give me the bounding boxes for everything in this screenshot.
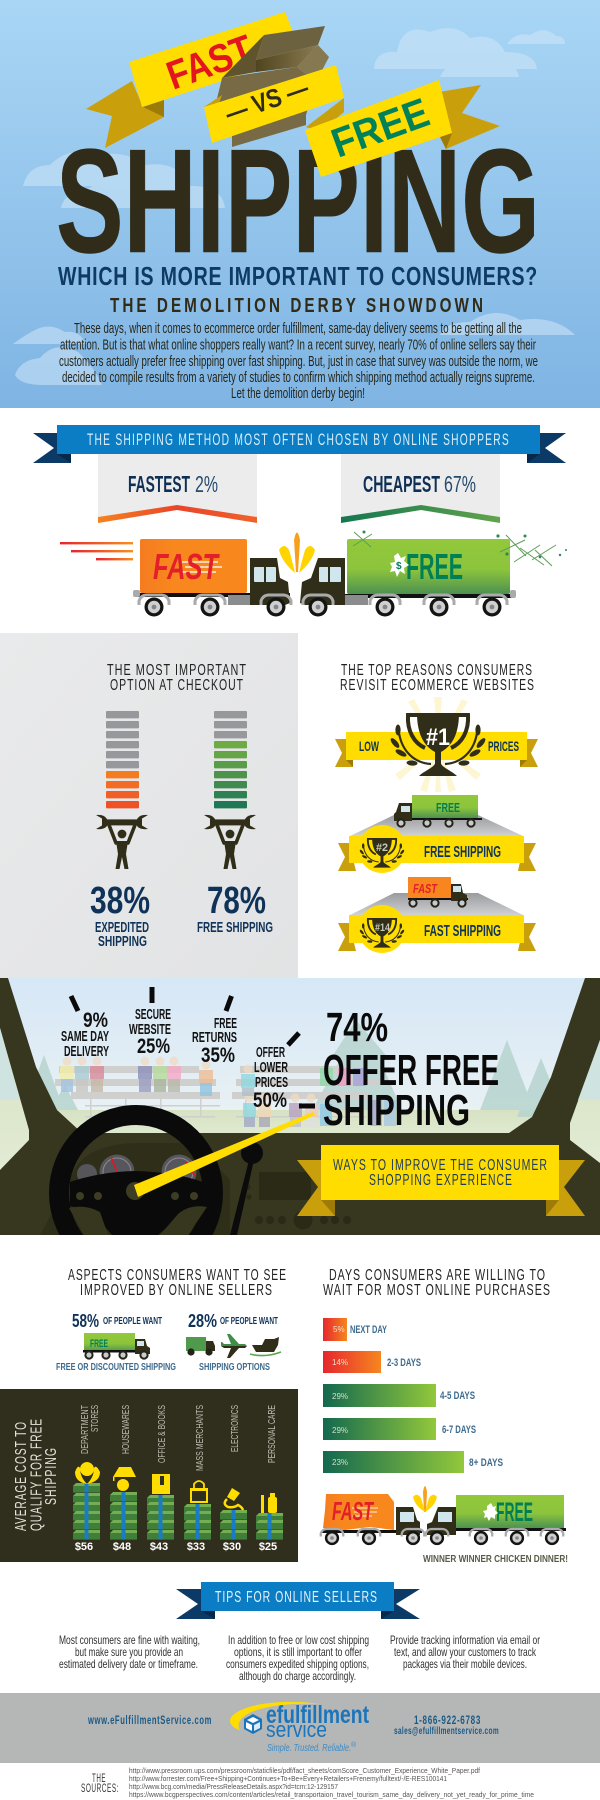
panel: windshield speedometer scene bbox=[0, 978, 600, 1235]
icon: gauges bbox=[77, 1154, 196, 1180]
ribbon: low prices rank 1: PRICES bbox=[488, 738, 519, 754]
ribbon: free shipping rank 2: #2 bbox=[376, 842, 388, 854]
icon: bleachers bbox=[55, 1066, 380, 1118]
icon: rays bbox=[395, 697, 481, 792]
phone and email: sales@efulfillmentservice.com bbox=[394, 1726, 499, 1737]
stat: secure website 25%: SECURE bbox=[135, 1007, 171, 1023]
stat: offer lower prices 50%: PRICES bbox=[255, 1075, 288, 1091]
panel: most often chosen bbox=[33, 425, 567, 616]
heading: aspects: ASPECTS CONSUMERS WANT TO SEE bbox=[68, 1267, 287, 1284]
heading: checkout: THE MOST IMPORTANT bbox=[107, 662, 247, 679]
label: expedited shipping: SHIPPING bbox=[98, 933, 147, 950]
labels: categories: HOUSEWARES bbox=[121, 1405, 132, 1454]
icon: clouds bbox=[13, 28, 575, 385]
needle: yellow pointer bbox=[134, 1112, 315, 1197]
chart: bar chart: 4-5 DAYS bbox=[440, 1390, 475, 1402]
stat: 9% same day delivery: SAME DAY bbox=[61, 1029, 109, 1045]
icon: trophy #1 bbox=[389, 713, 487, 776]
label: shipping options: SHIPPING OPTIONS bbox=[199, 1361, 270, 1373]
stat: 9% same day delivery: DELIVERY bbox=[64, 1044, 109, 1060]
stat: 74% offer free shipping bbox=[324, 1012, 498, 1126]
icon: free truck bbox=[300, 539, 516, 616]
logo: efulfillment bbox=[266, 1701, 370, 1729]
stat: 78%: 78% bbox=[207, 880, 266, 922]
icon: gearshift bbox=[230, 1142, 263, 1235]
ribbon: fast shipping rank 14: FAST SHIPPING bbox=[424, 923, 501, 940]
card: fastest 2%: FASTEST bbox=[128, 471, 190, 497]
stat: 58% of people want: OF PEOPLE WANT bbox=[103, 1315, 162, 1327]
intro paragraph: Let the demolition derby begin! bbox=[231, 386, 365, 402]
logo: service bbox=[266, 1717, 327, 1742]
icon: pine trees bbox=[38, 1022, 550, 1117]
logo bbox=[230, 1701, 370, 1754]
tip 3: Provide tracking information via email or bbox=[390, 1633, 540, 1647]
label: expedited shipping: EXPEDITED bbox=[95, 919, 149, 936]
values bbox=[75, 1541, 277, 1553]
panel: tips bbox=[59, 1582, 540, 1683]
stat: 58% of people want bbox=[72, 1311, 162, 1331]
ribbon: FREE bbox=[305, 80, 500, 177]
banner: tips for online sellers: TIPS FOR ONLINE SELLERS bbox=[215, 1589, 378, 1606]
icon: green sparkles bbox=[353, 530, 567, 566]
panel: footer contact band bbox=[0, 1693, 600, 1763]
road 2 bbox=[350, 815, 523, 836]
heading: average cost bbox=[13, 1418, 60, 1531]
stat: 28% of people want bbox=[188, 1311, 278, 1331]
stat: free returns 35%: RETURNS bbox=[192, 1030, 237, 1046]
ribbon: free shipping rank 2 bbox=[338, 825, 536, 873]
values: $33 bbox=[187, 1541, 205, 1553]
card: cheapest 67%: CHEAPEST bbox=[363, 471, 440, 497]
icon: free truck: FREE bbox=[406, 546, 463, 587]
stat: secure website 25%: 25% bbox=[137, 1035, 170, 1058]
icon: fast truck bbox=[133, 539, 291, 616]
stat: 58% of people want: 58% bbox=[72, 1311, 99, 1331]
stat: 74% offer free shipping: SHIPPING bbox=[323, 1086, 470, 1135]
tip 3 bbox=[390, 1633, 540, 1671]
stat: 28% of people want: 28% bbox=[188, 1311, 217, 1331]
label: the sources bbox=[81, 1771, 119, 1795]
chart: bar chart: NEXT DAY bbox=[350, 1324, 387, 1336]
labels: categories: MASS MERCHANTS bbox=[195, 1405, 206, 1471]
values: $48 bbox=[113, 1541, 131, 1553]
chart: bar chart: 5% bbox=[333, 1325, 345, 1334]
logo: ® bbox=[351, 1741, 357, 1749]
icon: free truck: $ bbox=[396, 561, 402, 572]
icon: steering wheel bbox=[49, 1105, 223, 1235]
tip 2 bbox=[226, 1633, 369, 1683]
ribbon: FAST bbox=[86, 12, 302, 148]
labels: categories: OFFICE & BOOKS bbox=[157, 1405, 168, 1463]
heading: average cost: AVERAGE COST TO bbox=[13, 1421, 30, 1531]
tip 1: Most consumers are fine with waiting, bbox=[59, 1633, 200, 1647]
ribbon: low prices rank 1 bbox=[335, 732, 538, 767]
source list bbox=[129, 1766, 534, 1799]
icon: speed lines bbox=[60, 542, 133, 560]
icon: free truck: FREE bbox=[90, 1338, 108, 1350]
ribbon: FREE: FREE bbox=[325, 89, 435, 166]
ribbon: VS bbox=[204, 65, 344, 143]
card: cheapest 67%: 67% bbox=[444, 471, 476, 497]
phone and email: 1-866-922-6783 bbox=[414, 1713, 481, 1727]
chart: money stacks bbox=[73, 1483, 283, 1540]
bar gauge: free shipping bbox=[214, 711, 247, 808]
icon: trophy #1: #1 bbox=[426, 724, 450, 751]
tip 2: In addition to free or low cost shipping bbox=[228, 1633, 369, 1647]
banner: tips for online sellers bbox=[176, 1582, 420, 1619]
heading: average cost: QUALIFY FOR FREE bbox=[28, 1418, 46, 1531]
heading: aspects: IMPROVED BY ONLINE SELLERS bbox=[80, 1282, 273, 1299]
ribbon: ways to improve: SHOPPING EXPERIENCE bbox=[369, 1172, 513, 1189]
road 14 bbox=[350, 893, 523, 915]
icon: windshield frame and dashboard bbox=[0, 978, 600, 1235]
icon: dash panel interior bbox=[40, 1143, 351, 1235]
intro paragraph bbox=[59, 321, 538, 402]
website: www.eFulfillmentService.com bbox=[87, 1713, 212, 1727]
panel: average cost to qualify bbox=[0, 1389, 298, 1562]
label: free shipping: FREE SHIPPING bbox=[197, 919, 273, 936]
label: expedited shipping bbox=[95, 919, 149, 950]
icon: crumpled fast truck: FAST bbox=[332, 1496, 374, 1526]
chart: bar chart: 29% bbox=[332, 1426, 348, 1435]
heading: revisit bbox=[340, 662, 535, 694]
icon: small fast truck: FAST bbox=[413, 881, 438, 896]
chart: bar chart: 23% bbox=[332, 1458, 348, 1467]
ribbon: FAST: FAST bbox=[161, 27, 259, 98]
subtitle: showdown: THE DEMOLITION DERBY SHOWDOWN bbox=[110, 295, 486, 317]
icon: small free truck: FREE bbox=[436, 800, 460, 815]
icon: side windows bbox=[0, 1028, 600, 1170]
label: the sources: THE bbox=[92, 1771, 106, 1785]
values: $25 bbox=[259, 1541, 277, 1553]
labels: categories bbox=[80, 1405, 278, 1471]
panel: most important option at checkout bbox=[0, 633, 298, 978]
labels: categories: ELECTRONICS bbox=[230, 1405, 241, 1452]
panel: aspects consumers want improved bbox=[56, 1267, 287, 1373]
icons: product categories bbox=[75, 1462, 277, 1513]
ribbon: free shipping rank 2: FREE SHIPPING bbox=[424, 844, 501, 861]
stat: secure website 25%: WEBSITE bbox=[129, 1022, 171, 1038]
chart: bar chart: 2-3 DAYS bbox=[387, 1357, 421, 1369]
labels: categories: DEPARTMENT bbox=[80, 1405, 91, 1454]
chart: bar chart: 6-7 DAYS bbox=[442, 1424, 476, 1436]
icon: crumpled fast truck bbox=[321, 1494, 424, 1545]
icon: cardboard box bbox=[216, 26, 329, 147]
heading: checkout bbox=[107, 662, 247, 694]
chart: bar chart: 14% bbox=[332, 1358, 348, 1367]
tip 1 bbox=[59, 1633, 200, 1671]
values: $43 bbox=[150, 1541, 168, 1553]
labels: categories: STORES bbox=[90, 1405, 101, 1432]
icon: free truck bbox=[426, 1495, 566, 1545]
icon: person lifting wrench left bbox=[96, 815, 148, 869]
heading: aspects bbox=[68, 1267, 287, 1299]
source list: https://www.bcgperspectives.com/content/articles/retail_transportaion_travel_tourism_same_day_delivery_not_yet_ready_for_prime_time bbox=[129, 1790, 534, 1799]
stat: 9% same day delivery bbox=[61, 1012, 109, 1056]
chart: bar chart: 29% bbox=[332, 1392, 348, 1401]
source list: http://www.bcg.com/media/PressReleaseDetails.aspx?id=tcm:12-129157 bbox=[129, 1782, 338, 1791]
heading: average cost: SHIPPING bbox=[43, 1447, 60, 1505]
stat: free returns 35% bbox=[192, 1018, 237, 1062]
label: the sources: SOURCES: bbox=[81, 1781, 119, 1795]
source list: http://www.forrester.com/Free+Shipping+Continues+To+Be+Every+Retailers+Frenemy/fulltext/-/E-RES100141 bbox=[129, 1774, 447, 1783]
ticks: dial marks bbox=[71, 987, 315, 1106]
label: free or discounted shipping: FREE OR DISCOUNTED SHIPPING bbox=[56, 1361, 176, 1373]
stat: free returns 35%: 35% bbox=[201, 1044, 235, 1067]
bar gauge: expedited bbox=[106, 711, 139, 808]
banner: shipping method bbox=[33, 425, 566, 463]
icon: person lifting wrench right bbox=[204, 815, 256, 869]
tip 1: but make sure you provide an bbox=[75, 1645, 183, 1659]
icon: small fast truck bbox=[408, 877, 468, 908]
stat: offer lower prices 50%: OFFER bbox=[256, 1045, 285, 1061]
ribbon: VS: — VS — bbox=[221, 72, 312, 129]
tip 1: estimated delivery date or timeframe. bbox=[59, 1657, 198, 1671]
stat: free returns 35%: FREE bbox=[214, 1016, 237, 1032]
panel: sources bbox=[81, 1766, 534, 1799]
values: $56 bbox=[75, 1541, 93, 1553]
phone and email bbox=[394, 1713, 499, 1737]
tip 2: consumers expedited shipping options, bbox=[226, 1657, 369, 1671]
source list: http://www.pressroom.ups.com/pressroom/staticfiles/pdf/fact_sheets/comScore_Customer_Experience_White_Paper.pdf bbox=[129, 1766, 481, 1775]
stat: 74% offer free shipping: OFFER FREE bbox=[323, 1046, 499, 1095]
stat: 28% of people want: OF PEOPLE WANT bbox=[220, 1315, 278, 1327]
panel: days willing to wait bbox=[321, 1267, 568, 1565]
ribbon: ways to improve bbox=[297, 1145, 585, 1216]
chart: bar chart: 8+ DAYS bbox=[469, 1457, 503, 1469]
icon: small free truck bbox=[394, 795, 482, 828]
stat: secure website 25% bbox=[129, 1009, 171, 1053]
tip 3: text, and allow your customers to track bbox=[394, 1645, 537, 1659]
card: fastest 2% bbox=[98, 454, 257, 523]
stat: offer lower prices 50%: 50% bbox=[253, 1089, 287, 1112]
tip 2: options, it is still important to offer bbox=[234, 1645, 362, 1659]
ribbon: low prices rank 1: LOW bbox=[359, 738, 379, 754]
tip 3: packages via their mobile devices. bbox=[403, 1657, 527, 1671]
stat: 38%: 38% bbox=[90, 880, 150, 922]
heading: checkout: OPTION AT CHECKOUT bbox=[110, 677, 244, 694]
stat: 9% same day delivery: 9% bbox=[83, 1009, 108, 1032]
card: cheapest 67% bbox=[341, 454, 500, 523]
icon: free truck: FREE bbox=[496, 1497, 533, 1527]
logo: Simple. Trusted. Reliable. bbox=[267, 1743, 351, 1754]
stat: 74% offer free shipping: 74% bbox=[326, 1004, 388, 1050]
ribbon: fast shipping rank 14: #14 bbox=[375, 922, 391, 934]
values: $30 bbox=[223, 1541, 241, 1553]
inner book mark and bag hole bbox=[160, 1476, 206, 1501]
icon: fast truck: FAST bbox=[153, 546, 220, 587]
icon: truck plane ship bbox=[186, 1334, 281, 1358]
labels: categories: PERSONAL CARE bbox=[267, 1405, 278, 1463]
panel: hero header bbox=[0, 0, 600, 408]
ribbon: fast shipping rank 14 bbox=[338, 905, 536, 953]
icon: free truck bbox=[83, 1333, 150, 1360]
icon: spectators bbox=[60, 1056, 396, 1127]
card: fastest 2%: 2% bbox=[195, 471, 218, 497]
heading: days bbox=[323, 1267, 551, 1299]
stat: offer lower prices 50%: LOWER bbox=[254, 1060, 288, 1076]
panel: top reasons to revisit bbox=[335, 662, 538, 953]
chart: bar chart bbox=[323, 1318, 503, 1473]
stat: offer lower prices 50% bbox=[254, 1047, 288, 1107]
icon: crash burst bbox=[413, 1486, 437, 1512]
tip 2: although do charge accordingly. bbox=[239, 1669, 356, 1683]
icon: crash burst bbox=[279, 532, 315, 573]
